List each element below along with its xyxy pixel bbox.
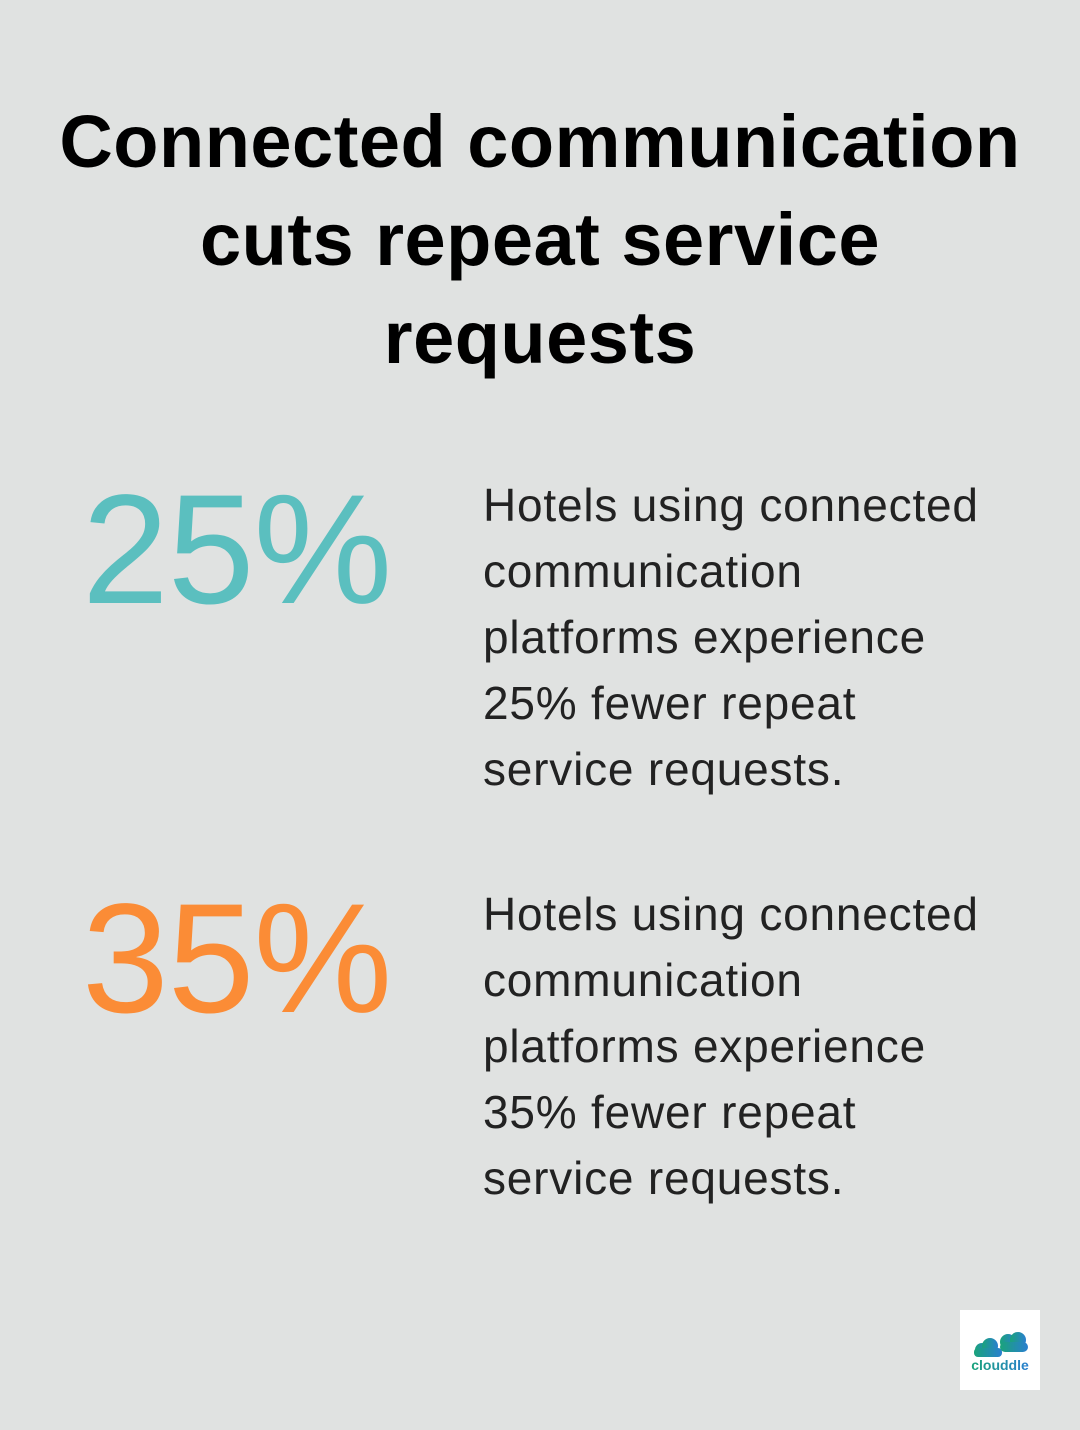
text: 35% description: 35% fewer repeat [483, 1086, 856, 1138]
text: 35% description [483, 888, 979, 1204]
text: 35% description: Hotels using connected [483, 888, 979, 940]
title: Connected communication [59, 100, 1021, 183]
text: 35% description: communication [483, 954, 803, 1006]
title: requests [384, 296, 696, 379]
text: 25% description: platforms experience [483, 611, 926, 663]
stat: 35%: 35% [82, 872, 391, 1046]
text: 25% description: service requests. [483, 743, 844, 795]
title [59, 100, 1021, 379]
text: 35% description: platforms experience [483, 1020, 926, 1072]
text: 25% description: 25% fewer repeat [483, 677, 856, 729]
logo: clouddle: clouddle [971, 1357, 1029, 1373]
logo: clouddle [960, 1310, 1040, 1390]
text: 25% description [483, 479, 979, 795]
text: 25% description: communication [483, 545, 803, 597]
text: 35% description: service requests. [483, 1152, 844, 1204]
stat: 25%: 25% [82, 463, 391, 637]
text: 25% description: Hotels using connected [483, 479, 979, 531]
title: cuts repeat service [200, 198, 880, 281]
